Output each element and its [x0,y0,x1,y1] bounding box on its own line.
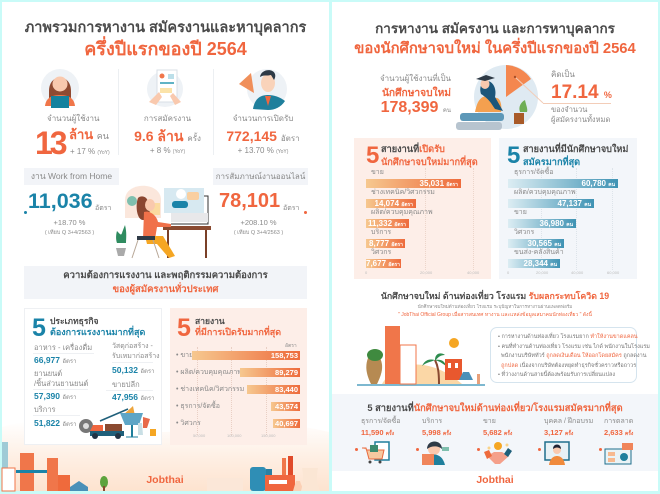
stat: admin: ธุรการ/จัดซื้อ [361,418,401,425]
stat: admin [361,416,401,437]
bar chart: job openings: 89,279 [275,368,298,377]
stat: graduate users [380,72,451,116]
banner: demand heading [24,266,307,299]
stat: applications: 9.6 ล้าน ครั้ง [134,128,201,144]
stat: work from home: อัตรา [95,205,111,212]
panel: top 5 fields graduates applied [499,138,637,279]
title: right [354,21,636,57]
title: right: การหางาน สมัครงาน และการหาบุคลากร [375,21,615,36]
stat: marketing [604,418,634,437]
illustration: right factory [207,456,318,491]
bar chart: graduate applications: ขนส่ง-คลังสินค้า [514,249,564,256]
illustration: graduate on books with pie [456,65,544,130]
bar chart: graduate applications: ขาย [514,209,527,216]
illustration: hotel and beach [357,326,485,386]
list: business types [33,342,160,428]
bar chart: graduate applications [507,166,619,275]
stat: users [35,114,110,161]
icon: trainer on screen [544,441,570,465]
stat: openings: จำนวนการเปิดรับ [233,114,293,123]
heading: top 5 job fields: 5 [177,314,191,342]
bar chart: openings for graduates: 11,332 อัตรา [368,219,406,228]
list: business types: 47,956 อัตรา [112,392,154,402]
panel: right graduates [332,2,658,491]
bar chart: job openings: 158,753 [271,351,298,360]
stat: service: บริการ [422,418,442,425]
logo: right Jobthai: Jobthai [476,474,514,486]
heading: fields applied: 5 [507,142,520,169]
bar chart: job openings: • ผลิต/ควบคุมคุณภาพ [176,369,242,376]
background: peach city haze [2,432,329,491]
bar chart: openings for graduates: 35,031 อัตรา [420,179,458,188]
stat: 17.14 percent: ของจำนวน [551,105,587,114]
stat: work from home: งาน Work from Home [31,171,112,181]
stat: 17.14 percent: คิดเป็น [551,70,575,79]
illustration: left city [2,442,108,492]
callout: covid impacts: • ที่ว่างงานด้านสายนี้ต้องพร้อมรับการเปลี่ยนแปลง [498,372,615,378]
bar chart: graduate applications: 40,000 [571,270,583,275]
stat: sales [483,418,512,437]
callout: covid impacts [490,327,637,383]
bar chart: openings for graduates: 8,777 อัตรา [369,239,403,248]
stat: users: 13 [35,125,65,161]
bar chart: graduate applications: 0 [507,270,509,275]
list: business types: 66,977 อัตรา [34,355,76,365]
heading: covid impact [381,290,609,318]
bar chart: graduate applications: 30,565 คน [528,239,561,248]
icon: resume form [147,70,183,107]
heading: top 5 business types: ต้องการแรงงานมากที่สุด [50,327,145,337]
panel: left overview [2,2,329,491]
title: left: ภาพรวมการหางาน สมัครงานและหาบุคลากร [25,20,306,36]
stat: online interviews: 78,101 [219,190,280,212]
panel: top 5 business types [24,308,162,445]
bar chart: job openings [176,343,300,438]
bar chart: graduate applications: 47,137 คน [558,199,591,208]
heading: top 5 job fields: ที่มีการเปิดรับมากที่สุด [195,327,281,337]
stat: online interviews [213,168,308,236]
bar chart: job openings: 100,000 [227,433,241,438]
stat: work from home: ( เทียบ Q 3+4/2563 ) [45,230,94,236]
bar chart: job openings: • วิศวกร [176,420,201,427]
list: business types: วัสดุก่อสร้าง - [112,343,153,350]
logo: left Jobthai: Jobthai [146,474,184,486]
bar chart: graduate applications: 20,000 [536,270,548,275]
illustration: truck and tools [79,406,156,439]
stat: applications: การสมัครงาน [144,114,191,123]
bar chart: job openings: 43,574 [275,402,298,411]
title: left [25,20,306,59]
bar chart: graduate applications: วิศวกร [514,229,534,236]
stat: HR training: บุคคล / ฝึกอบรม [544,418,593,425]
stat: online interviews: +208.10 % [240,218,277,227]
list: business types: อาหาร - เครื่องดื่ม [34,343,92,352]
heading: fields opening: 5 [366,142,379,169]
stat: applications [134,114,201,155]
stat: users: จำนวนผู้ใช้งาน [47,114,100,123]
bar chart: job openings: • ช่างเทคนิค/วิศวกรรม [176,386,244,393]
stat: users: ล้าน คน [69,127,109,142]
bar chart: job openings: 150,000 [261,433,275,438]
bar chart: openings for graduates: 7,677 อัตรา [366,259,400,268]
heading: tourism top 5: 5 สายงานที่นักศึกษาจบใหม่ด้านท่องเที่ยว/โรงแรมสมัครมากที่สุด [367,403,623,413]
heading: fields applied [507,142,628,169]
bar chart: openings for graduates: บริการ [371,229,391,236]
icon: service agent [422,442,449,465]
bar chart: job openings: • ขาย [176,352,193,359]
title: left: ครึ่งปีแรกของปี 2564 [84,39,247,59]
list: business types: รับเหมาก่อสร้าง [112,353,160,360]
stat: users: + 17 % (YoY) [70,147,110,156]
heading: covid impact: นักศึกษาจบใหม่ ด้านท่องเที่ยว โรงแรม รับผลกระทบโควิด 19 [381,291,609,301]
illustration: woman at desk [116,186,211,258]
bar chart: openings for graduates [365,168,479,275]
stat: HR training [544,417,593,437]
list: business types: ขายปลีก [112,380,140,389]
stat: sales: ขาย [483,418,496,425]
callout: covid impacts: • การหางานด้านท่องเที่ยว โรงแรมยาก ทำให้งานขาดแคลน [498,334,638,340]
stat: graduate users: 178,399 คน [381,99,451,116]
stat: graduate users: จำนวนผู้ใช้งานที่เป็น [380,74,451,83]
list: business types: 50,132 อัตรา [112,365,154,375]
list: business types: บริการ [34,405,56,414]
bar chart: openings for graduates: 14,074 อัตรา [375,199,413,208]
stat: online interviews: อัตรา [283,205,299,212]
bar chart: openings for graduates: ขาย [371,169,384,176]
panel: tourism graduate applications [332,394,658,471]
icon: woman with laptop [41,69,79,108]
stat: HR training: 3,127 ครั้ง [544,428,573,437]
bar chart: graduate applications: ผลิต/ควบคุมคุณภาพ [514,189,576,196]
stat: openings: 772,145 อัตรา [226,128,300,144]
icon: marketing dashboard [604,443,633,464]
callout: covid impacts: ถูกปลด เนื่องจากบริษัทต้องหยุดทำธุรกิจชั่วคราวหรือถาวร [501,362,636,368]
heading: covid impact: " JobThai Official Group เมื่อสารสนเทศ หางาน และแหล่งข้อมูลเสมาคมนักท่องเที่ยว " ดังนี้ [398,312,592,318]
list: business types: 57,390 อัตรา [34,391,76,401]
stat: work from home [24,168,119,236]
panel: top 5 job fields [170,308,307,445]
stat: applications: + 8 % (YoY) [150,146,185,155]
stat: online interviews: ( เทียบ Q 3+4/2563 ) [234,230,283,236]
bar chart: openings for graduates: ช่างเทคนิค/วิศวกรรม [371,189,435,196]
heading: top 5 job fields [177,314,281,342]
panel: top 5 fields opening to graduates [354,138,491,279]
stat: sales: 5,682 ครั้ง [483,428,512,437]
heading: covid impact: นักศึกษาจบใหม่ด้านท่องเที่ยว โรงแรม ระบุปัญหาในการหางานผ่านแพลตฟอร์ม [418,304,572,309]
list: business types: 51,822 อัตรา [34,418,76,428]
callout: covid impacts: • คนที่ทำงานด้านท่องเที่ยว โรงแรม เช่น ไกด์ พนักงานในโรงแรม [498,344,650,350]
stat: openings [226,114,300,155]
bar chart: job openings: • ธุรการ/จัดซื้อ [176,403,220,410]
bar chart: openings for graduates: 40,000 [467,270,479,275]
stat: 17.14 percent: ผู้สมัครงานทั้งหมด [551,115,610,124]
bar chart: job openings: 40,697 [275,419,298,428]
banner: demand heading: ของผู้สมัครงานทั่วประเทศ [113,284,218,295]
stat: openings: + 13.70 % (YoY) [238,146,288,155]
heading: fields opening: นักศึกษาจบใหม่มากที่สุด [381,157,478,167]
bar chart: openings for graduates: 0 [365,270,367,275]
icon: man with megaphone [239,69,287,110]
bar chart: job openings: 50,000 [193,433,205,438]
bar chart: graduate applications: 28,344 คน [524,259,557,268]
bar chart: job openings: 83,440 [275,385,298,394]
heading: fields opening: สายงานที่เปิดรับ [381,144,445,154]
stat: 17.14 percent: 17.14 % [551,82,612,103]
bar chart: graduate applications: 36,980 คน [540,219,573,228]
stat: 17.14 percent [543,69,612,124]
callout: covid impacts: พนักงานบริษัททัวร์ ถูกลดเงินเดือน ให้ออกโดยสมัคร ถูกลดงาน [501,353,646,359]
stat: marketing: 2,633 ครั้ง [604,428,633,437]
stat: work from home: +18.70 % [54,218,85,227]
icon: shopping cart [362,441,390,464]
heading: top 5 job fields: สายงาน [195,316,225,326]
banner: demand heading: ความต้องการแรงงาน และพฤติกรรมความต้องการ [63,270,268,281]
bar chart: graduate applications: 60,000 [607,270,619,275]
stat: service: 5,998 ครั้ง [422,428,451,437]
heading: top 5 business types: 5 [32,314,46,342]
bar chart: openings for graduates: ผลิต/ควบคุมคุณภาพ [371,209,433,216]
bar chart: graduate applications: ธุรการ/จัดซื้อ [514,169,554,176]
stat: marketing: การตลาด [604,418,633,425]
heading: top 5 business types [32,314,145,342]
stat: online interviews: การสัมภาษณ์งานออนไลน์ [216,172,305,181]
heading: fields opening [366,142,478,169]
icon: handshake [484,442,512,464]
heading: fields applied: สมัครมากที่สุด [523,157,580,167]
stat: graduate users: นักศึกษาจบใหม่ [382,88,451,99]
bar chart: openings for graduates: วิศวกร [371,249,391,256]
stat: service [422,418,452,437]
heading: top 5 business types: ประเภทธุรกิจ [50,316,99,326]
list: business types: /ชิ้นส่วนยานยนต์ [34,379,88,388]
stat: admin: 11,590 ครั้ง [361,428,394,437]
bar chart: graduate applications: 60,780 คน [582,179,615,188]
title: right: ของนักศึกษาจบใหม่ ในครึ่งปีแรกของปี 2564 [354,41,636,57]
list: business types: ยานยนต์ [34,369,62,378]
heading: fields applied: สายงานที่มีนักศึกษาจบใหม่ [523,144,628,154]
stat: work from home: 11,036 [28,189,93,213]
bar chart: openings for graduates: 20,000 [420,270,432,275]
bar chart: job openings: อัตรา [285,343,297,349]
